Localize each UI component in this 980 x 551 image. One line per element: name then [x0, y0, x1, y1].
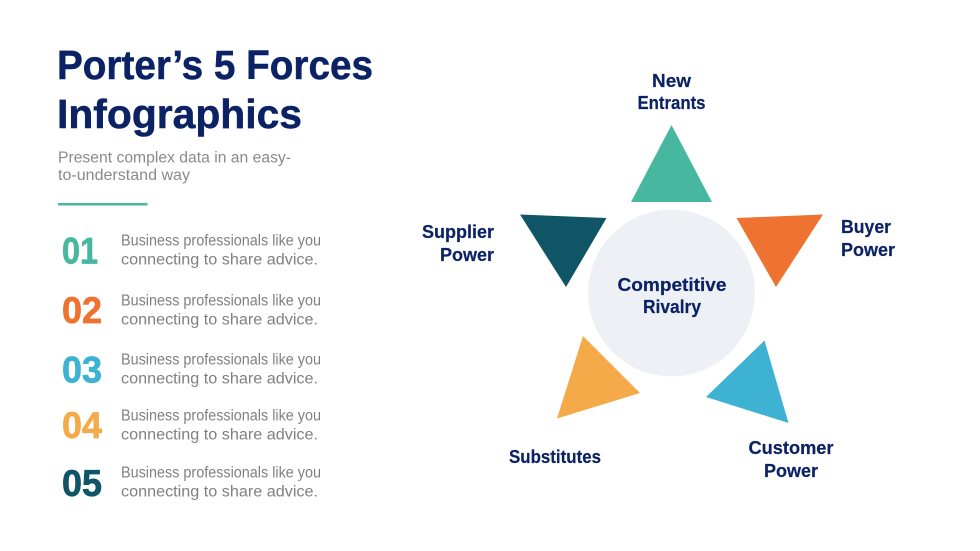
- triangle: new entrants: [631, 125, 712, 202]
- label: customer power: Customer: [748, 437, 834, 458]
- label: supplier power: Supplier: [422, 221, 494, 242]
- list item 04: 04: [62, 405, 102, 446]
- list item 01: [62, 230, 321, 272]
- label: customer power: Power: [764, 460, 818, 481]
- label: new entrants: Entrants: [638, 92, 706, 113]
- label: substitutes: Substitutes: [509, 446, 601, 467]
- list item 01: Business professionals like you: [121, 232, 321, 250]
- list item 02: [62, 290, 321, 331]
- accent rule: [58, 203, 148, 206]
- label: new entrants: [638, 70, 706, 113]
- title: Porter’s 5 Forces: [57, 42, 373, 88]
- center circle: competitive rivalry: [588, 210, 755, 376]
- list item 02: 02: [62, 290, 102, 331]
- label: buyer power: Power: [841, 239, 895, 260]
- label: supplier power: [422, 221, 494, 265]
- title: Infographics: [57, 91, 302, 137]
- center circle: competitive rivalry: Rivalry: [643, 296, 702, 317]
- list item 03: [62, 350, 321, 390]
- title: [57, 42, 373, 137]
- subtitle: to-understand way: [58, 167, 190, 184]
- triangle: supplier power: [520, 214, 606, 287]
- list item 03: Business professionals like you: [121, 352, 321, 368]
- list item 01: connecting to share advice.: [121, 252, 318, 268]
- list item 03: connecting to share advice.: [121, 370, 318, 388]
- label: buyer power: [841, 216, 895, 260]
- label: customer power: [748, 437, 834, 481]
- list item 04: [62, 405, 321, 446]
- triangle: customer power: [706, 340, 788, 423]
- label: new entrants: New: [652, 70, 692, 91]
- list item 02: connecting to share advice.: [121, 312, 318, 328]
- label: supplier power: Power: [440, 244, 494, 265]
- triangle: substitutes: [557, 336, 640, 418]
- triangle: buyer power: [736, 214, 823, 287]
- label: buyer power: Buyer: [841, 216, 891, 237]
- list item 04: connecting to share advice.: [121, 426, 318, 444]
- list item 04: Business professionals like you: [121, 408, 321, 424]
- list item 05: Business professionals like you: [121, 464, 321, 482]
- list item 01: 01: [62, 230, 98, 272]
- subtitle: Present complex data in an easy-: [58, 150, 291, 166]
- subtitle: [58, 150, 291, 184]
- list item 05: connecting to share advice.: [121, 484, 318, 500]
- list item 05: [62, 463, 321, 504]
- list item 05: 05: [62, 463, 102, 504]
- list item 02: Business professionals like you: [121, 292, 321, 310]
- center circle: competitive rivalry: Competitive: [618, 274, 726, 295]
- list item 03: 03: [62, 350, 102, 390]
